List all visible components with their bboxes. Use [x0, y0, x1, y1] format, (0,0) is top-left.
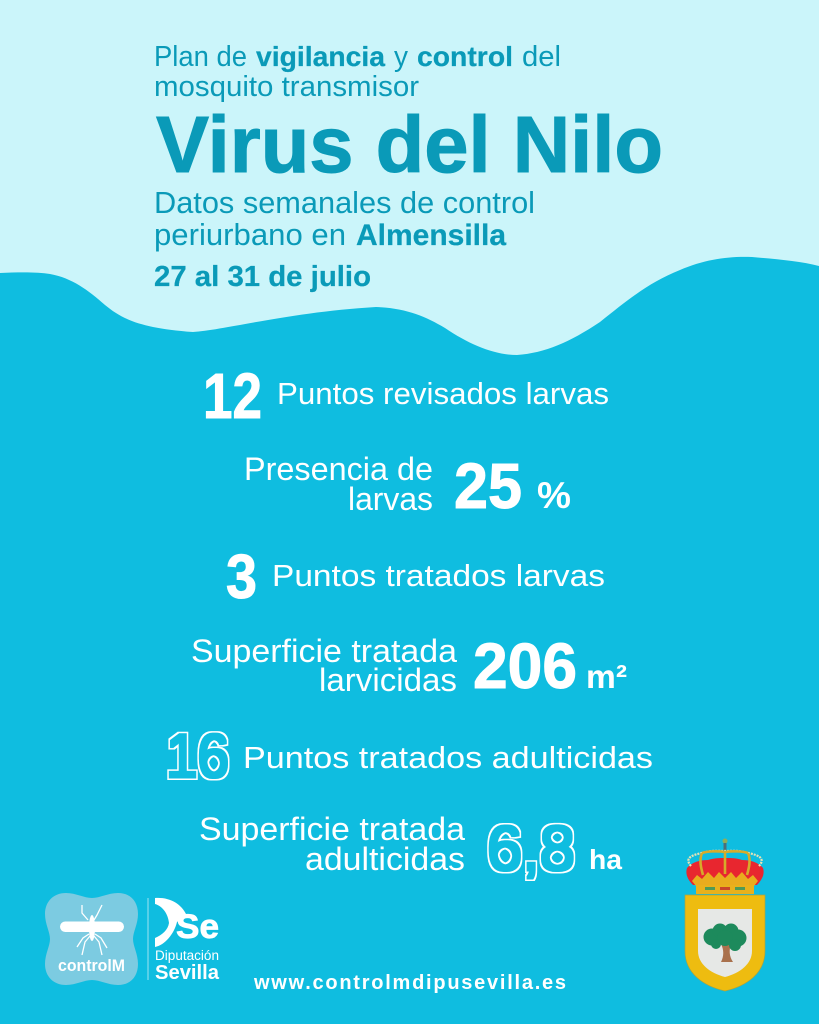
logo: Diputación de Sevilla: Diputación: [155, 948, 219, 963]
stat: superficie adulticidas: Superficie tratada: [199, 811, 466, 847]
stat: superficie adulticidas: adulticidas: [305, 841, 465, 877]
header text block: Almensilla: [356, 219, 506, 252]
stat: superficie larvicidas: m²: [586, 658, 627, 695]
header text block: vigilancia: [256, 41, 385, 72]
logo: Diputación de Sevilla: [155, 898, 220, 984]
stat: puntos revisados larvas: [203, 360, 609, 432]
logo: controlM: [45, 893, 138, 985]
stat: superficie larvicidas: 206: [473, 630, 577, 702]
shield: [685, 895, 765, 991]
stat: superficie adulticidas: 6,8: [487, 814, 575, 884]
logo: Diputación de Sevilla: Sevilla: [155, 962, 220, 984]
logo: Diputación de Sevilla: Se: [176, 908, 219, 946]
icon: tree: [704, 924, 746, 962]
header text block: y: [394, 41, 408, 73]
header text block: Plan de: [154, 41, 247, 73]
header text block: periurbano en: [154, 218, 346, 252]
stat: superficie larvicidas: larvicidas: [319, 662, 457, 698]
header text block: Datos semanales de control: [154, 186, 535, 220]
stat: puntos revisados larvas: 12: [203, 360, 262, 432]
coat of arms: [685, 838, 765, 991]
stat: puntos tratados adulticidas: Puntos tratados adulticidas: [243, 740, 653, 775]
stat: presencia de larvas: Presencia de: [244, 451, 433, 487]
stat: puntos tratados adulticidas: [166, 722, 653, 790]
wave background panel: [0, 257, 819, 1024]
stat: superficie adulticidas: [199, 811, 622, 884]
stat: puntos tratados larvas: [226, 543, 605, 612]
crown: [686, 838, 764, 894]
header text block: mosquito transmisor: [154, 71, 419, 103]
header text block: control: [417, 41, 513, 72]
stat: puntos tratados larvas: 3: [226, 543, 257, 612]
header text block: [154, 41, 663, 293]
stat: puntos revisados larvas: Puntos revisados larvas: [277, 376, 609, 411]
logo: controlM: controlM: [58, 956, 125, 975]
date: 27 al 31 de julio: [154, 261, 371, 293]
header text block: del: [522, 41, 561, 73]
stat: superficie larvicidas: Superficie tratada: [191, 633, 458, 669]
stat: presencia de larvas: 25: [454, 450, 522, 522]
stat: superficie larvicidas: [191, 630, 627, 702]
title: Virus del Nilo: [156, 100, 663, 189]
stat: superficie adulticidas: ha: [589, 844, 622, 875]
stat: puntos tratados adulticidas: 16: [166, 722, 229, 790]
stat: presencia de larvas: larvas: [348, 481, 433, 517]
stat: presencia de larvas: [244, 450, 571, 522]
icon: mosquito: [60, 905, 124, 955]
divider: [148, 898, 149, 980]
website url: www.controlmdipusevilla.es: [253, 972, 566, 994]
stat: presencia de larvas: %: [537, 475, 571, 516]
stat: puntos tratados larvas: Puntos tratados larvas: [272, 558, 605, 593]
